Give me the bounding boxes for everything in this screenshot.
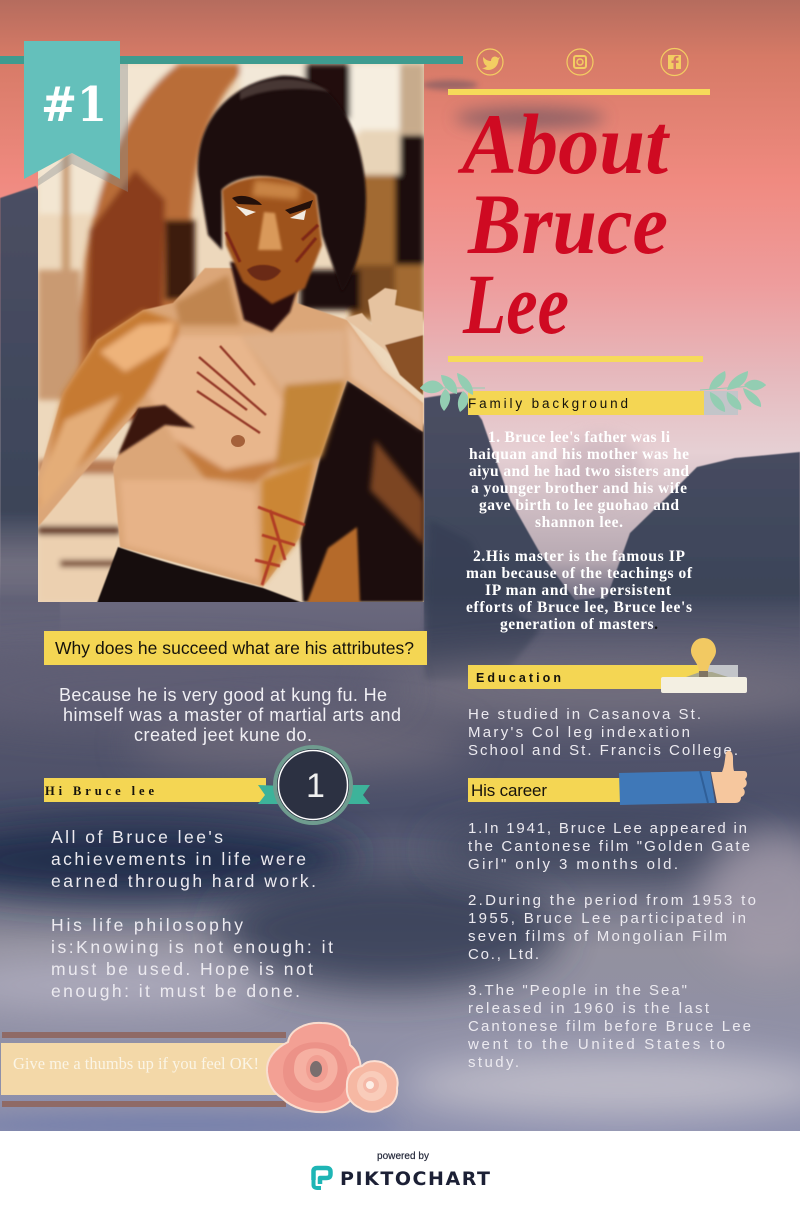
hair xyxy=(198,76,366,292)
yellow rule below title xyxy=(448,356,703,362)
title: Bruce xyxy=(467,176,668,272)
icon: twitter xyxy=(477,49,503,75)
callout: thumbs up banner xyxy=(1,1032,289,1107)
heading: why does he succeed: Why does he succeed what are his attributes? xyxy=(55,638,414,658)
text block: family background: 2.His master is the famous IP xyxy=(473,548,686,565)
armpit shadow xyxy=(118,405,195,455)
heading: education xyxy=(468,665,738,689)
text block: education: Mary's Col leg indexation xyxy=(468,724,690,741)
ribbon badge "#1": #1 xyxy=(41,77,107,133)
text block: education: He studied in Casanova St. xyxy=(468,706,701,723)
text block: family background: IP man and the persistent xyxy=(485,582,672,599)
text block: education: School and St. Francis College. xyxy=(468,742,738,759)
icon: roses xyxy=(267,1023,398,1112)
text block: family background: a younger brother and his wife xyxy=(471,480,687,497)
heading: his career xyxy=(468,778,620,802)
text block: family background: 1. Bruce lee's father was li xyxy=(488,429,671,446)
text block: career: the Cantonese film "Golden Gate xyxy=(468,838,750,855)
yellow rule above title xyxy=(448,89,710,95)
text block: why he succeeds: himself was a master of martial arts and xyxy=(63,705,401,725)
text block: career: Co., Ltd. xyxy=(468,946,539,963)
chest wounds xyxy=(197,346,266,433)
text block: education xyxy=(468,706,738,759)
text block: achievements and philosophy xyxy=(51,827,333,1001)
text block: career: seven films of Mongolian Film xyxy=(468,928,727,945)
footer band xyxy=(0,1131,800,1211)
Piktochart logo: PIKTOCHART xyxy=(340,1168,490,1190)
text block: family background: generation of masters. xyxy=(500,616,658,633)
number badge 1: 1 xyxy=(306,767,325,805)
text block: achievements and philosophy: All of Bruce lee's xyxy=(51,827,223,847)
text block: family background: man because of the teachings of xyxy=(466,565,693,582)
heading: his career: His career xyxy=(471,781,547,800)
icon: small rose xyxy=(347,1061,398,1112)
text block: career: 1955, Bruce Lee participated in xyxy=(468,910,746,927)
torso and arms xyxy=(38,268,423,587)
icon: thumbs up arm xyxy=(619,751,747,805)
powered by text: powered by xyxy=(377,1151,429,1162)
text block: why he succeeds: created jeet kune do. xyxy=(134,725,312,745)
ribbon badge "#1" xyxy=(24,41,128,192)
heading: Hi Bruce lee: Hi Bruce lee xyxy=(45,784,154,798)
text block: family background: shannon lee. xyxy=(535,514,623,531)
callout: thumbs up banner: Give me a thumbs up if you feel OK! xyxy=(13,1054,259,1073)
icon: instagram xyxy=(567,49,593,75)
icon: large rose xyxy=(267,1023,361,1112)
heading: education: Education xyxy=(476,671,561,685)
icon: light bulb on paper xyxy=(661,638,747,693)
text block: achievements and philosophy: His life philosophy xyxy=(51,915,243,935)
text block: career: 3.The "People in the Sea" xyxy=(468,982,687,999)
dark background on the right xyxy=(300,380,424,602)
text block: career: Girl" only 3 months old. xyxy=(468,856,678,873)
social icons xyxy=(477,48,688,76)
number badge 1 xyxy=(258,745,370,825)
title: About xyxy=(457,96,671,192)
text block: career xyxy=(467,820,756,1071)
neck shadow xyxy=(230,262,306,332)
text block: career: went to the United States to xyxy=(467,1036,725,1053)
heading: why does he succeed xyxy=(44,631,427,665)
icon: left leaf sprig xyxy=(420,373,485,412)
face xyxy=(222,177,322,304)
text block: achievements and philosophy: achievements in life were xyxy=(51,849,306,869)
text block: career: 2.During the period from 1953 to xyxy=(468,892,756,909)
heading: Hi Bruce lee xyxy=(44,778,266,802)
pants xyxy=(97,547,303,603)
text block: career: Cantonese film before Bruce Lee xyxy=(468,1018,751,1035)
text block: career: study. xyxy=(468,1054,519,1071)
title: Lee xyxy=(462,256,569,352)
text block: family background: gave birth to lee guohao and xyxy=(479,497,679,514)
text block: career: released in 1960 is the last xyxy=(468,1000,710,1017)
top teal rule xyxy=(0,56,463,64)
text block: achievements and philosophy: earned through hard work. xyxy=(51,871,316,891)
heading: family background xyxy=(468,391,738,415)
title xyxy=(457,96,671,352)
heading: family background: Family background xyxy=(468,396,628,411)
text block: why he succeeds: Because he is very good at kung fu. He xyxy=(59,685,387,705)
text block: family background xyxy=(466,429,693,633)
fist xyxy=(345,288,423,395)
text block: why he succeeds xyxy=(59,685,401,745)
icon: facebook xyxy=(661,48,688,76)
text block: family background: haiquan and his mother was he xyxy=(469,446,689,463)
photo: Bruce Lee in fighting stance xyxy=(38,64,424,603)
text block: family background: efforts of Bruce lee, Bruce lee's xyxy=(466,599,692,616)
text block: achievements and philosophy: is:Knowing is not enough: it xyxy=(51,937,333,957)
text block: family background: aiyu and he had two sisters and xyxy=(469,463,689,480)
text block: career: 1.In 1941, Bruce Lee appeared in xyxy=(468,820,747,837)
text block: achievements and philosophy: enough: it must be done. xyxy=(51,981,300,1001)
text block: achievements and philosophy: must be used. Hope is not xyxy=(51,959,313,979)
icon: right leaf sprig xyxy=(700,371,766,412)
